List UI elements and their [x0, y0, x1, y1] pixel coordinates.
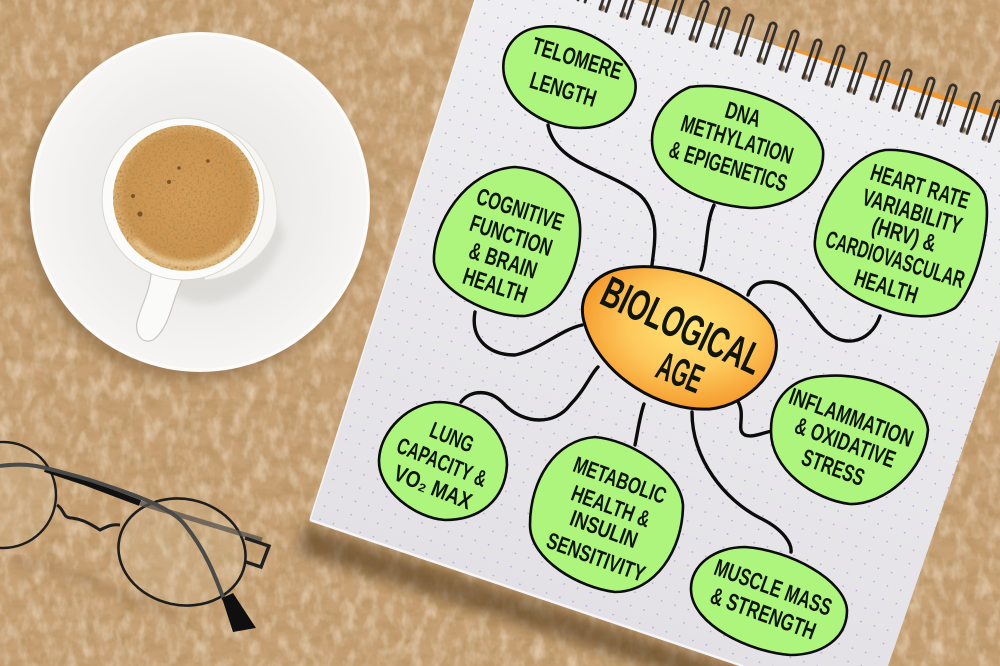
cup rim — [102, 118, 264, 280]
eyeglasses — [0, 442, 269, 632]
node: heart rate variability: HEALTH — [851, 265, 921, 309]
coffee surface — [113, 125, 259, 271]
node: metabolic health and insulin sensitivity: METABOLIC — [570, 451, 670, 509]
node: DNA methylation and epigenetics: & EPIGENETICS — [666, 136, 790, 198]
spiral binding — [578, 0, 1000, 141]
node: DNA methylation and epigenetics: METHYLATION — [678, 110, 796, 170]
node: inflammation and oxidative stress: STRESS — [798, 444, 868, 492]
page — [310, 0, 1000, 666]
central node: biological age — [582, 267, 776, 409]
node: metabolic health and insulin sensitivity: INSULIN — [567, 505, 641, 553]
node: cognitive function and brain health — [434, 167, 580, 316]
node: inflammation and oxidative stress — [771, 376, 928, 504]
orange back cover edge — [780, 44, 1000, 122]
node: metabolic health and insulin sensitivity: SENSITIVITY — [543, 527, 649, 587]
notebook shadow — [296, 524, 760, 666]
left lens — [0, 442, 56, 548]
node: cognitive function and brain health: & BRAIN — [466, 237, 540, 285]
cup handle — [137, 273, 182, 341]
node: lung capacity and VO2 max: LUNG — [426, 417, 478, 457]
saucer — [23, 32, 370, 381]
node: DNA methylation and epigenetics — [652, 86, 823, 208]
upper temple arm — [45, 469, 140, 503]
node: DNA methylation and epigenetics: DNA — [722, 97, 764, 133]
lower temple arm — [0, 465, 224, 600]
dot grid — [310, 0, 1000, 666]
node: cognitive function and brain health: HEALTH — [459, 263, 531, 309]
mind map connectors — [461, 125, 880, 552]
node: heart rate variability: (HRV) & — [868, 212, 940, 258]
node: telomere length: LENGTH — [527, 67, 599, 113]
temple hook — [245, 538, 269, 567]
node: telomere length — [503, 26, 636, 128]
temple tip — [222, 593, 256, 632]
node: muscle mass and strength: MUSCLE MASS — [711, 554, 835, 622]
node: inflammation and oxidative stress: INFLAMMATION — [785, 383, 917, 453]
central node: biological age: AGE — [650, 344, 710, 402]
node: lung capacity and VO2 max — [379, 402, 507, 520]
central node: biological age: BIOLOGICAL — [594, 267, 770, 385]
node: muscle mass and strength: & STRENGTH — [707, 583, 819, 645]
node: lung capacity and VO2 max: VO₂ MAX — [390, 460, 476, 515]
node: telomere length: TELOMERE — [529, 32, 625, 86]
page stack edge — [310, 520, 743, 666]
node: cognitive function and brain health: COGNITIVE — [473, 183, 567, 237]
bridge — [57, 505, 120, 530]
right lens — [108, 487, 256, 617]
node: metabolic health and insulin sensitivity — [530, 437, 683, 592]
notebook — [296, 0, 1000, 666]
node: lung capacity and VO2 max: CAPACITY & — [393, 432, 491, 492]
node: metabolic health and insulin sensitivity: HEALTH & — [568, 480, 654, 532]
cup body — [185, 130, 277, 280]
node: muscle mass and strength — [691, 547, 847, 655]
binding holes — [599, 5, 988, 141]
node: cognitive function and brain health: FUNCTION — [466, 210, 556, 262]
node: heart rate variability — [815, 150, 987, 316]
node: inflammation and oxidative stress: & OXIDATIVE — [791, 412, 899, 474]
coffee cup — [102, 118, 285, 341]
